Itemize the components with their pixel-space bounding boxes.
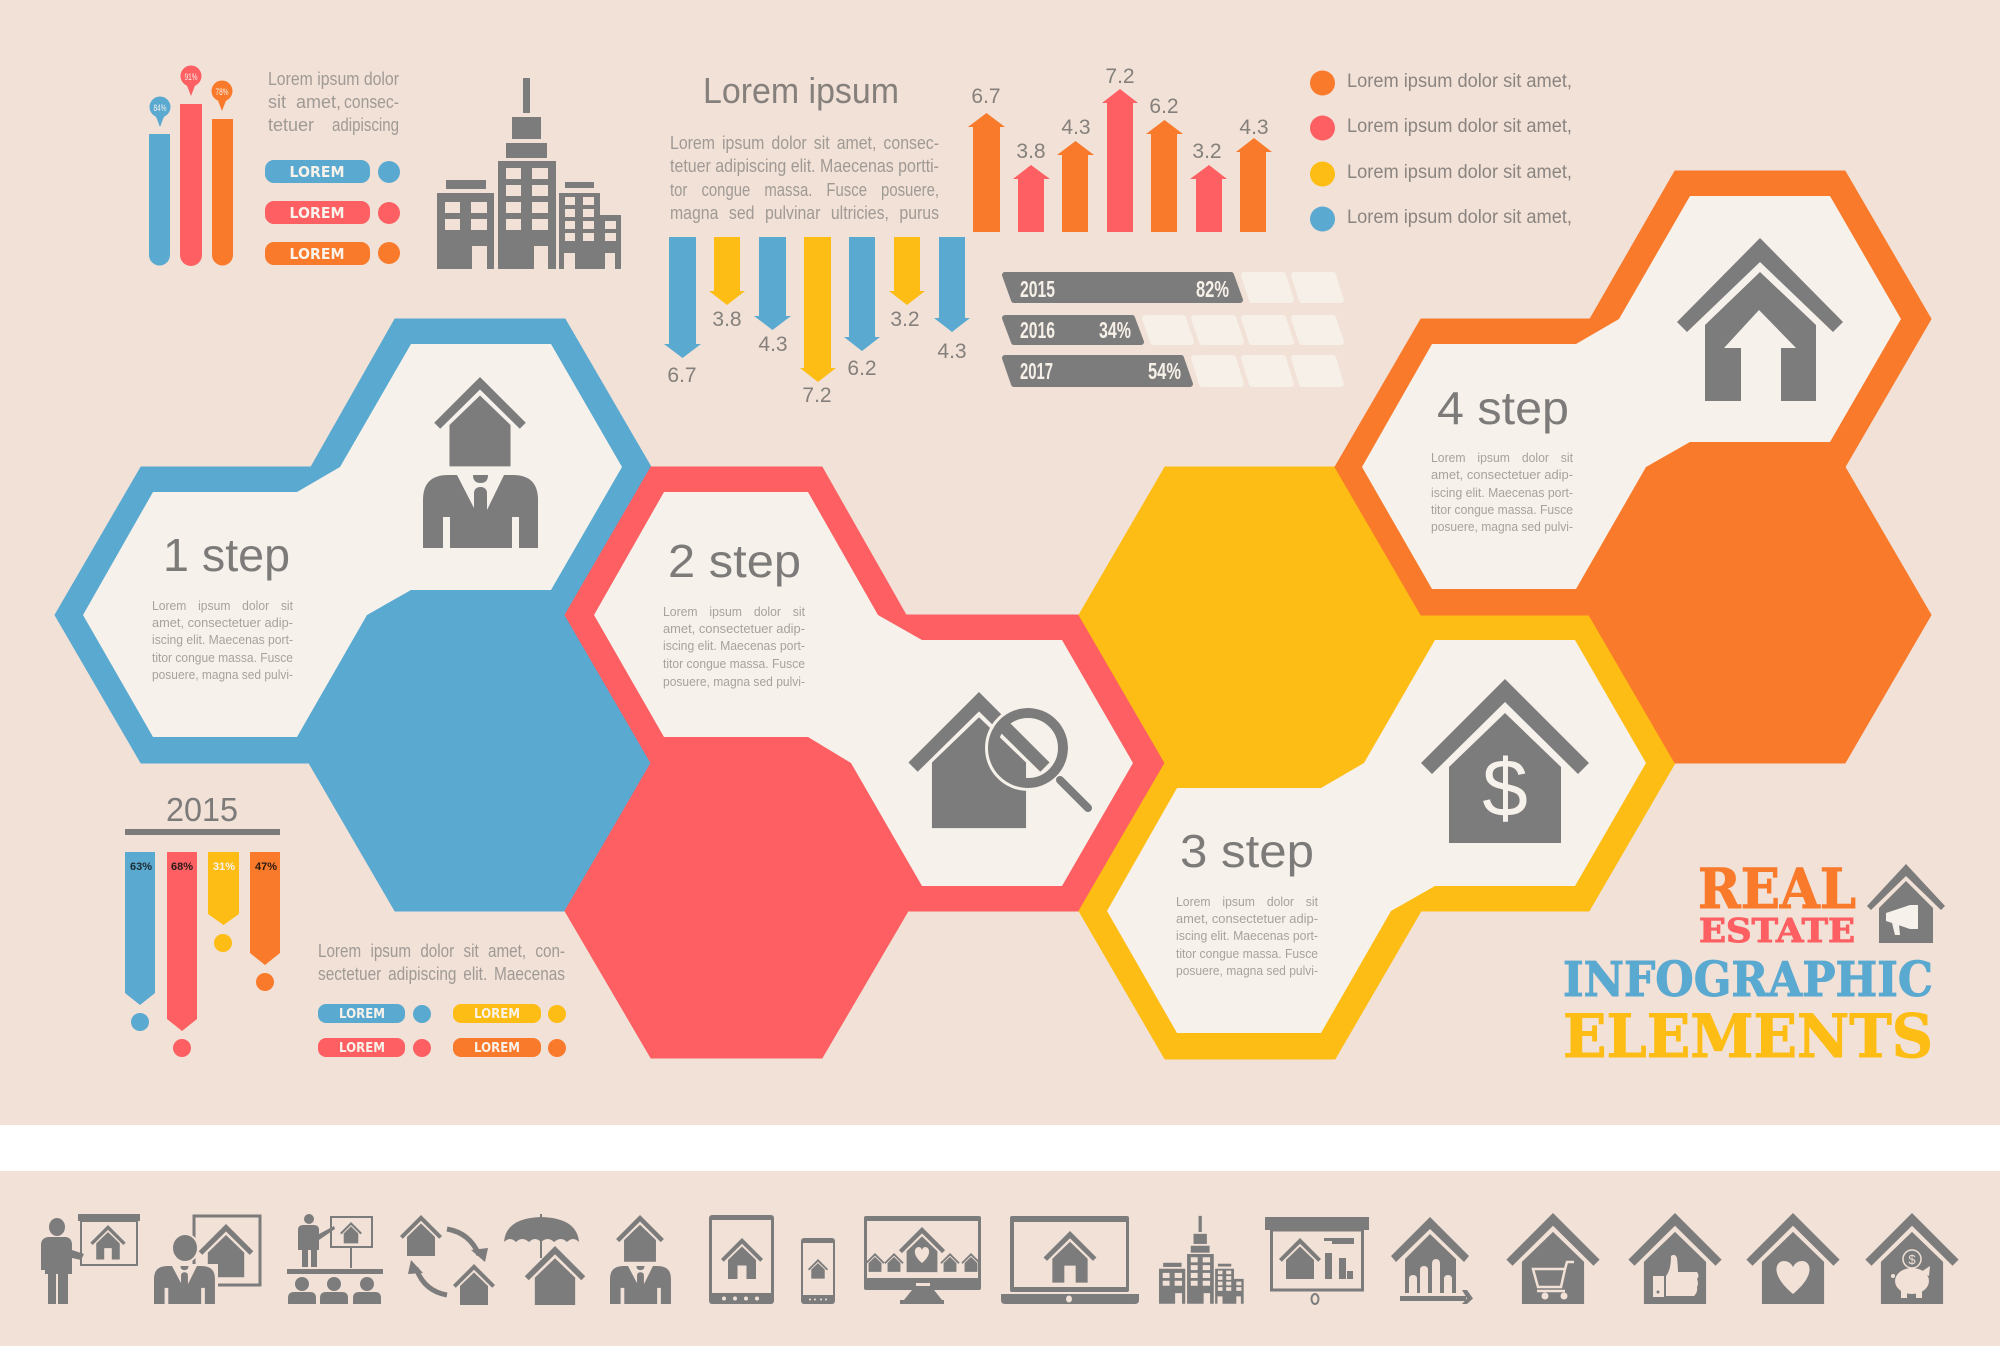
icon: tablet with house — [709, 1215, 774, 1304]
chart: down arrows: 6.2 — [847, 357, 877, 380]
icon: house with dollar sign: $ — [1482, 743, 1528, 834]
chart: up arrows: 4.3 — [1061, 116, 1091, 139]
text block: step 1 body: titor congue massa. Fusce — [152, 650, 293, 665]
chart: 2015 hanging banners: 63% — [130, 861, 152, 873]
text block: step 3 body: titor congue massa. Fusce — [1176, 946, 1318, 961]
legend: bottom-left pills: LOREM — [339, 1041, 385, 1056]
panel: step 1 hexagons (blue) — [55, 319, 651, 911]
icon: businessman with house frame — [152, 1216, 260, 1306]
text block: step 2 body: posuere, magna sed pulvi- — [663, 674, 805, 689]
text block: step 1 body — [152, 598, 293, 682]
chart: top-left rounded bars with pins — [149, 66, 233, 266]
icon: house-headed businessman — [423, 377, 538, 548]
chart: yearly progress bars: 54% — [1148, 358, 1181, 384]
panel: step 3 hexagons (yellow) — [1079, 467, 1675, 1059]
icon: phone with house — [801, 1238, 835, 1304]
icon: house cycle arrows — [400, 1215, 495, 1305]
chart: up arrows: 6.2 — [1149, 95, 1179, 118]
text block: step 2 body — [663, 604, 805, 689]
text block: top-left lorem: consec- — [344, 92, 399, 112]
icon: presenter with house board — [41, 1214, 140, 1304]
text block: bottom-left lorem: Lorem ipsum dolor sit amet, con- — [318, 941, 565, 961]
text block: step 4 body: Lorem ipsum dolor sit — [1431, 450, 1573, 465]
chart: down arrows: 3.8 — [712, 308, 742, 331]
icon: speaker and audience — [287, 1214, 383, 1304]
icon: house with thumbs up — [1628, 1213, 1722, 1304]
icon: house with piggy bank: $ — [1908, 1252, 1916, 1267]
chart: up arrows: 7.2 — [1105, 65, 1135, 88]
chart: up arrows: 4.3 — [1239, 116, 1269, 139]
text block: step 3 body: iscing elit. Maecenas port- — [1176, 928, 1318, 943]
text block: step 3 body: posuere, magna sed pulvi- — [1176, 963, 1318, 978]
chart: yearly progress bars: 2016 — [1020, 317, 1055, 343]
chart: yearly progress bars — [1005, 275, 1341, 384]
legend: right of arrows: Lorem ipsum dolor sit amet, — [1347, 116, 1572, 137]
text block: step 3 body: Lorem ipsum dolor sit — [1176, 894, 1318, 909]
title: real estate infographic elements: ESTATE — [1699, 911, 1855, 950]
legend: top-left pills: LOREM — [290, 245, 344, 263]
icon: house under magnifier — [908, 692, 1088, 828]
chart: up arrows: 3.8 — [1016, 140, 1046, 163]
chart: 2015 hanging banners: 47% — [255, 861, 277, 873]
icon: house with piggy bank — [1865, 1213, 1959, 1304]
text block: step 3 body — [1176, 894, 1318, 978]
heading: 3 step: 3 step — [1180, 825, 1314, 877]
text block: step 4 body: amet, consectetuer adip- — [1431, 467, 1573, 482]
legend: right of arrows: Lorem ipsum dolor sit amet, — [1347, 71, 1572, 92]
heading: Lorem ipsum: Lorem ipsum — [703, 70, 899, 111]
icon: house-head businessman — [610, 1215, 671, 1304]
icon: projector board with house and bars — [1265, 1217, 1369, 1304]
chart: yearly progress bars: 34% — [1099, 317, 1131, 343]
icon: small city buildings — [1159, 1216, 1244, 1304]
icon: house with heart — [1746, 1213, 1840, 1304]
text block: step 1 body: Lorem ipsum dolor sit — [152, 598, 293, 613]
text block: step 4 body: iscing elit. Maecenas port- — [1431, 485, 1573, 500]
legend: top-left pills — [265, 160, 400, 265]
icon: house with dollar sign — [1421, 679, 1589, 843]
text block: bottom-left lorem: sectetuer adipiscing elit. Maecenas — [318, 964, 565, 984]
text block: step 1 body: iscing elit. Maecenas port- — [152, 632, 293, 647]
legend: bottom-left pills — [318, 1004, 566, 1057]
panel: step 2 hexagons (red) — [565, 467, 1165, 1058]
text block: center paragraph: Lorem ipsum dolor sit amet, consec- — [670, 133, 939, 153]
text block: top-left lorem — [268, 69, 399, 135]
text block: step 2 body: iscing elit. Maecenas port- — [663, 638, 805, 653]
icon: house with shopping cart — [1506, 1213, 1600, 1304]
text block: step 3 body: amet, consectetuer adip- — [1176, 911, 1318, 926]
chart: top-left rounded bars with pins: 91% — [184, 72, 198, 82]
icon: umbrella over house — [504, 1214, 585, 1305]
chart: yearly progress bars: 2015 — [1020, 276, 1055, 302]
chart: up arrows: 6.7 — [971, 85, 1001, 108]
chart: down arrows: 7.2 — [802, 384, 832, 407]
icon: house with megaphone — [1867, 864, 1945, 943]
legend: bottom-left pills: LOREM — [474, 1041, 520, 1056]
title: real estate infographic elements — [1563, 856, 1933, 1072]
legend: right of arrows: Lorem ipsum dolor sit amet, — [1347, 207, 1572, 228]
heading: 2 step: 2 step — [668, 535, 801, 587]
chart: down arrows — [664, 237, 970, 407]
text block: step 1 body: posuere, magna sed pulvi- — [152, 667, 293, 682]
chart: down arrows: 4.3 — [758, 333, 788, 356]
text block: top-left lorem: adipiscing — [332, 115, 399, 135]
chart: down arrows: 4.3 — [937, 340, 967, 363]
chart: yearly progress bars: 82% — [1196, 276, 1229, 302]
heading: 4 step: 4 step — [1437, 382, 1569, 434]
icon: city buildings — [437, 78, 621, 269]
text block: top-left lorem: amet, — [296, 92, 341, 112]
chart: 2015 hanging banners: 68% — [171, 861, 193, 873]
text block: center paragraph: magna sed pulvinar ultricies, purus — [670, 203, 939, 223]
legend: top-left pills: LOREM — [290, 163, 344, 181]
text block: top-left lorem: Lorem ipsum dolor — [268, 69, 399, 89]
text block: step 2 body: Lorem ipsum dolor sit — [663, 604, 805, 619]
legend: bottom-left pills: LOREM — [474, 1007, 520, 1022]
legend: right of arrows — [1310, 70, 1572, 232]
heading: 1 step: 1 step — [163, 529, 290, 581]
text block: center paragraph: tetuer adipiscing elit. Maecenas portti- — [670, 156, 939, 176]
text block: step 2 body: titor congue massa. Fusce — [663, 656, 805, 671]
icon row: bottom band icons — [41, 1213, 1959, 1306]
legend: top-left pills: LOREM — [290, 204, 344, 222]
chart: top-left rounded bars with pins: 78% — [216, 87, 228, 97]
title: real estate infographic elements: REAL — [1698, 856, 1856, 921]
icon: desktop monitor with houses — [864, 1216, 981, 1304]
text block: center paragraph: tor congue massa. Fusce posuere, — [670, 180, 939, 200]
chart: down arrows: 6.7 — [667, 364, 697, 387]
chart: yearly progress bars: 2017 — [1020, 358, 1053, 384]
panel: step 4 hexagons (orange) — [1335, 171, 1931, 763]
chart: 2015 hanging banners: 2015 — [166, 791, 238, 828]
legend: right of arrows: Lorem ipsum dolor sit amet, — [1347, 162, 1572, 183]
text block: center paragraph — [670, 133, 939, 223]
text block: step 4 body: titor congue massa. Fusce — [1431, 502, 1573, 517]
text block: step 4 body: posuere, magna sed pulvi- — [1431, 519, 1573, 534]
chart: up arrows: 3.2 — [1192, 140, 1222, 163]
legend: bottom-left pills: LOREM — [339, 1007, 385, 1022]
icon: house with chart and arrow — [1391, 1217, 1473, 1304]
text block: bottom-left lorem — [318, 941, 565, 984]
chart: 2015 hanging banners: 31% — [213, 861, 235, 873]
text block: top-left lorem: sit — [268, 92, 286, 112]
chart: up arrows — [968, 65, 1272, 232]
title: real estate infographic elements: INFOGRAPHIC — [1563, 952, 1933, 1008]
chart: 2015 hanging banners — [125, 791, 280, 1057]
icon: house with up-arrow door — [1677, 238, 1843, 401]
title: real estate infographic elements: ELEMENTS — [1563, 1002, 1933, 1072]
chart: top-left rounded bars with pins: 84% — [154, 103, 166, 113]
text block: step 4 body — [1431, 450, 1573, 534]
text block: top-left lorem: tetuer — [268, 115, 314, 135]
text block: step 2 body: amet, consectetuer adip- — [663, 621, 805, 636]
icon: laptop with house — [1001, 1216, 1139, 1304]
text block: step 1 body: amet, consectetuer adip- — [152, 615, 293, 630]
chart: down arrows: 3.2 — [890, 308, 920, 331]
